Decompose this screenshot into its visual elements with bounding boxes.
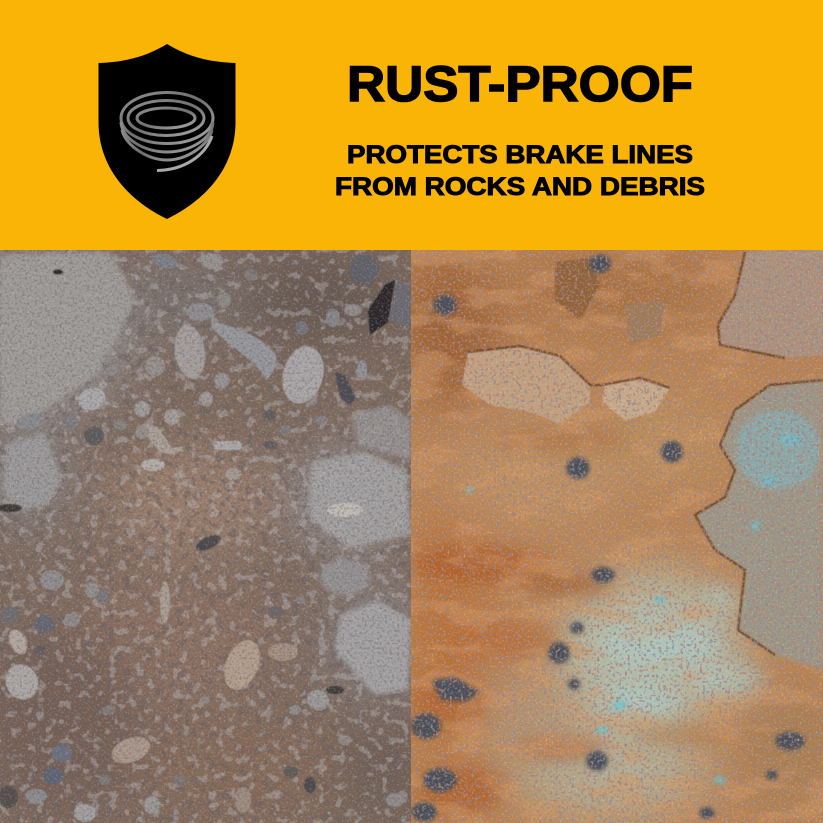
pebble texture <box>0 250 411 823</box>
fine ground grain <box>0 250 411 823</box>
pale turquoise wash <box>600 585 765 714</box>
rust speckle <box>411 250 823 823</box>
dark rust edges <box>468 252 823 655</box>
flaked paint patches <box>462 250 823 424</box>
turquoise flecks <box>466 435 800 784</box>
coiled line <box>121 92 213 170</box>
shield <box>98 44 236 219</box>
rock slabs <box>0 252 411 695</box>
subtitle <box>335 141 705 201</box>
orange rust streaks <box>410 430 750 815</box>
yellow header band <box>0 0 823 250</box>
subtitle line 2: FROM ROCKS AND DEBRIS <box>335 173 705 201</box>
teal corroded patches right <box>695 380 823 670</box>
dark blue-grey corrosion spots <box>411 255 805 822</box>
subtitle line 1: PROTECTS BRAKE LINES <box>347 141 693 169</box>
icon: shield with coiled brake line <box>98 44 236 219</box>
photo: rocks and gravel road <box>0 245 435 823</box>
stones <box>0 251 411 822</box>
title: RUST-PROOF <box>347 56 693 112</box>
large-scale rust mottling <box>411 250 823 823</box>
photo: rusted metal surface <box>400 250 823 823</box>
